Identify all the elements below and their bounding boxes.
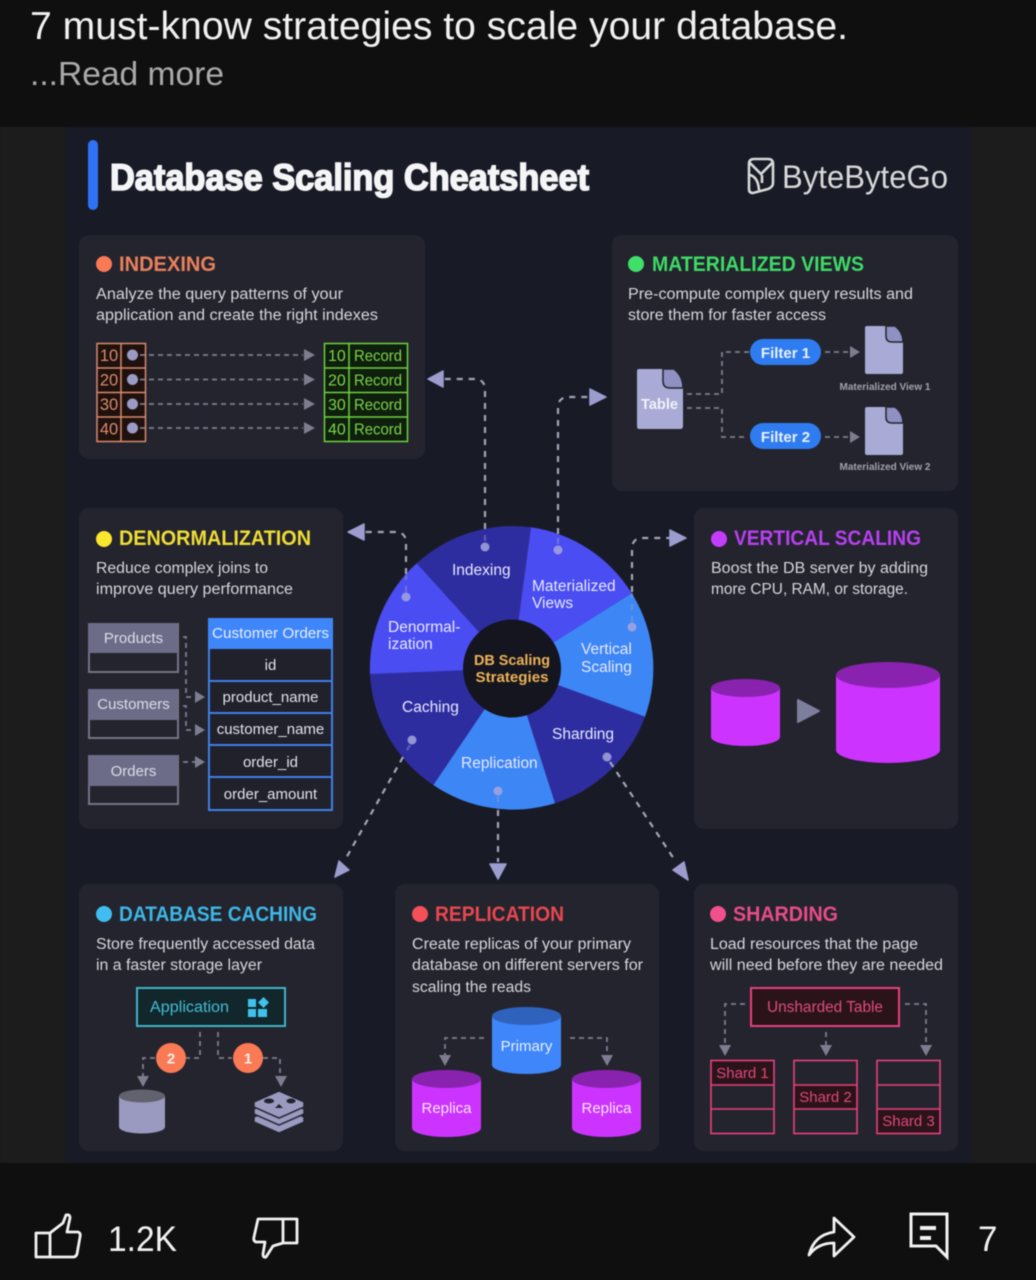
comment count: 7 — [978, 1220, 997, 1259]
record table: 30 — [328, 397, 346, 414]
title — [88, 140, 589, 210]
primary database: Primary — [501, 1038, 553, 1055]
panel: materialized views: Pre-compute complex query results and — [628, 286, 913, 303]
wheel labels: Vertical — [581, 641, 632, 658]
panel: replication: database on different servers for — [412, 957, 643, 974]
materialized view 1 — [840, 326, 931, 393]
filter 1 — [750, 339, 821, 365]
table document — [637, 369, 683, 429]
filter 1: Filter 1 — [761, 345, 810, 362]
table document: Table — [641, 396, 678, 413]
customer orders table: order_amount — [224, 786, 318, 803]
panel: materialized views: store them for faster access — [628, 307, 826, 324]
index table: 30 — [100, 396, 118, 414]
customer orders table: customer_name — [217, 721, 324, 738]
record table: Record — [354, 348, 402, 365]
icon: dislike — [254, 1219, 297, 1257]
replica right — [572, 1070, 641, 1137]
shard 3: Shard 3 — [882, 1113, 935, 1130]
panel: indexing: INDEXING — [119, 253, 216, 276]
like count: 1.2K — [108, 1220, 177, 1259]
source tables: Products — [104, 630, 163, 647]
wheel labels: ization — [388, 636, 433, 653]
record table: Record — [354, 372, 402, 390]
redis icon — [254, 1091, 304, 1133]
panel: denormalization: Reduce complex joins to — [96, 560, 268, 577]
scale arrow — [798, 700, 819, 722]
arrow: to materialized views — [554, 389, 606, 554]
panel: indexing: Analyze the query patterns of your — [96, 286, 343, 303]
unsharded table — [751, 988, 899, 1026]
unsharded table: Unsharded Table — [767, 999, 883, 1016]
wheel hub: Strategies — [476, 669, 548, 686]
customer orders table: Customer Orders — [212, 625, 329, 642]
title: Database Scaling Cheatsheet — [110, 157, 589, 198]
wheel labels: Caching — [402, 699, 459, 716]
shard 1 — [711, 1060, 774, 1134]
panel: vertical scaling — [694, 508, 958, 829]
panel: denormalization — [79, 508, 343, 829]
icon: like — [36, 1215, 80, 1257]
application box — [137, 988, 285, 1026]
step 2: 2 — [167, 1050, 175, 1068]
post caption — [30, 5, 848, 92]
panel: denormalization: improve query performance — [96, 581, 293, 598]
panel: replication: REPLICATION — [435, 903, 564, 926]
step 1: 1 — [244, 1050, 252, 1068]
replica left — [412, 1070, 481, 1137]
small database — [711, 679, 780, 746]
panel: replication: scaling the reads — [412, 979, 531, 996]
panel: database caching: in a faster storage layer — [96, 957, 262, 974]
source tables: Orders — [111, 763, 156, 780]
wheel labels: Materialized — [532, 578, 616, 595]
index table: 10 — [100, 347, 118, 365]
index table — [97, 344, 146, 442]
replica right: Replica — [581, 1100, 632, 1117]
wheel labels: Scaling — [581, 659, 632, 676]
materialized view 1: Materialized View 1 — [840, 382, 931, 393]
panel: replication: Create replicas of your primary — [412, 936, 631, 953]
replication connectors — [439, 1038, 613, 1066]
application box: Application — [150, 999, 229, 1016]
panel: indexing — [79, 235, 425, 459]
panel: vertical scaling: Boost the DB server by adding — [711, 560, 928, 577]
panel: vertical scaling: VERTICAL SCALING — [734, 527, 921, 550]
wheel labels: Views — [532, 595, 573, 612]
arrowheads — [850, 346, 860, 443]
wheel labels: Denormal- — [388, 619, 460, 636]
post caption: 7 must-know strategies to scale your database. — [30, 5, 848, 48]
record table: 10 — [328, 348, 346, 365]
shard 2: Shard 2 — [799, 1089, 852, 1106]
source tables: Customers — [97, 696, 170, 713]
primary database — [492, 1007, 561, 1074]
arrow: to indexing — [428, 371, 490, 552]
wheel labels: Indexing — [452, 562, 511, 579]
wheel labels — [388, 562, 632, 772]
panel: sharding: Load resources that the page — [710, 936, 918, 953]
panel: database caching — [79, 884, 343, 1151]
panel: sharding: SHARDING — [733, 903, 838, 926]
customer orders table: id — [265, 657, 276, 674]
shard 3 — [877, 1060, 940, 1134]
shard 2 — [794, 1060, 857, 1134]
wheel labels: Sharding — [552, 726, 614, 743]
record table: 40 — [328, 422, 346, 438]
wheel hub — [463, 620, 561, 718]
logo: ByteByteGo: ByteByteGo — [782, 159, 948, 195]
record table: 20 — [328, 372, 346, 390]
database icon — [119, 1090, 165, 1134]
index table: 40 — [100, 420, 118, 438]
source tables — [88, 623, 178, 804]
panel: denormalization: DENORMALIZATION — [119, 527, 311, 550]
panel: materialized views: MATERIALIZED VIEWS — [652, 253, 864, 276]
panel: replication — [395, 884, 659, 1151]
join connectors — [183, 637, 205, 768]
customer orders table: product_name — [223, 689, 318, 706]
record table — [324, 344, 408, 442]
arrow: to denormalization — [348, 524, 410, 602]
icon: share — [809, 1218, 854, 1256]
panel: database caching: DATABASE CACHING — [119, 903, 317, 926]
record table: Record — [354, 422, 402, 438]
arrow: to replication — [490, 786, 506, 879]
index table: 20 — [100, 372, 118, 390]
panel: materialized views — [612, 235, 958, 491]
panel: database caching: Store frequently accessed data — [96, 936, 315, 953]
panel: sharding: will need before they are needed — [709, 957, 943, 974]
arrow: to vertical scaling — [628, 530, 686, 632]
customer orders table — [208, 618, 333, 810]
arrow: to caching — [335, 736, 416, 877]
materialized view 2 — [840, 407, 931, 473]
wheel hub: DB Scaling — [474, 652, 550, 669]
arrow: to sharding — [602, 752, 688, 880]
panel: indexing: application and create the right indexes — [96, 307, 378, 324]
shard connectors — [719, 1004, 932, 1056]
materialized view 2: Materialized View 2 — [840, 462, 931, 473]
strategy wheel — [370, 526, 653, 810]
filter 2: Filter 2 — [761, 429, 810, 446]
filter connectors — [687, 352, 850, 437]
record table: Record — [354, 397, 402, 414]
panel: vertical scaling: more CPU, RAM, or storage. — [711, 581, 908, 598]
index pointer arrows — [140, 349, 315, 434]
step 2 — [156, 1043, 186, 1073]
caching flow — [137, 1032, 287, 1087]
customer orders table: order_id — [243, 754, 298, 771]
icon: comments — [911, 1214, 947, 1257]
filter 2 — [750, 423, 821, 449]
replica left: Replica — [421, 1100, 472, 1117]
step 1 — [233, 1043, 263, 1073]
shard 1: Shard 1 — [716, 1065, 769, 1082]
panel: sharding — [694, 884, 958, 1151]
large database — [836, 662, 940, 763]
post caption: ...Read more — [30, 55, 224, 92]
wheel labels: Replication — [461, 755, 538, 772]
